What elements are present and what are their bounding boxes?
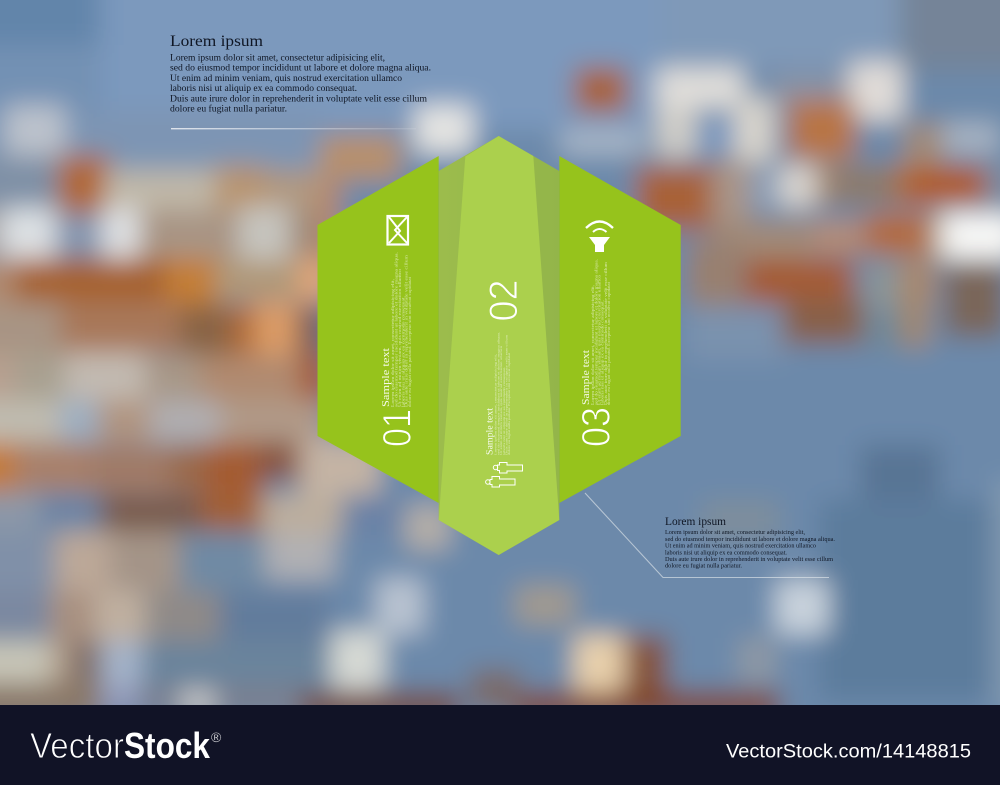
callout: top text block: dolore eu fugiat nulla pariatur. [170, 104, 287, 114]
body text 03: Duis aute irure dolor in reprehenderit in voluptate velit esse cillum [604, 262, 608, 405]
body text 02: Lorem ipsum dolor sit amet, consectetur adipisicing elit, [494, 354, 498, 455]
panel 03 content [574, 222, 618, 447]
icon: wifi speaker [586, 222, 613, 252]
panel 02 content [482, 280, 526, 487]
callout: top text block: sed do eiusmod tempor incididunt ut labore et dolore magna aliqua. [170, 64, 431, 74]
callout: lower text block: Lorem ipsum [665, 516, 726, 528]
callout: lower text block [665, 516, 835, 570]
center segment front [439, 136, 559, 555]
callout: top text block: laboris nisi ut aliquip ex ea commodo consequat. [170, 84, 357, 94]
body text 03: dolore eu fugiat nulla pariatur. Excepteur sint occaecat cupidatat [607, 281, 611, 405]
body text 03: laboris nisi ut aliquip ex ea commodo consequat. [601, 300, 605, 405]
sample heading 03: Sample text [581, 350, 592, 405]
callout: top text block: Lorem ipsum dolor sit amet, consectetur adipisicing elit, [170, 54, 385, 64]
body text 01: sed do eiusmod tempor incididunt ut labore et dolore magna aliqua. [394, 252, 398, 407]
right segment [559, 156, 681, 503]
callout: lower text block: laboris nisi ut aliquip ex ea commodo consequat. [665, 549, 787, 556]
callout: top text block [170, 33, 431, 114]
body text 02: dolore eu fugiat nulla pariatur. Excepteur sint occaecat cupidatat [507, 353, 511, 455]
panel 01 content [376, 216, 420, 447]
body text 02: Ut enim ad minim veniam, quis nostrud exercitation ullamco [499, 346, 504, 455]
sample heading 01: Sample text [380, 348, 392, 407]
callout: top text block: Ut enim ad minim veniam, quis nostrud exercitation ullamco [170, 74, 402, 84]
top callout line [171, 128, 416, 129]
callout: lower text block: Duis aute irure dolor in reprehenderit in voluptate velit esse cillum [665, 556, 833, 563]
body text 02: Duis aute irure dolor in reprehenderit in voluptate velit esse cillum [504, 335, 508, 455]
center segment back fold [439, 136, 559, 555]
hexagon diagram [318, 136, 681, 555]
footer image id: VectorStock.com/14148815 [726, 742, 971, 763]
footer logo: Stock [124, 725, 211, 766]
body text 01: Ut enim ad minim veniam, quis nostrud exercitation ullamco [397, 269, 403, 407]
callout: top text block: Lorem ipsum [170, 33, 264, 50]
body text 01 [390, 252, 412, 407]
body text 02 [494, 332, 511, 455]
callout: lower text block: Ut enim ad minim veniam, quis nostrud exercitation ullamco [665, 543, 816, 550]
icon: bottles [486, 462, 522, 487]
footer bar [0, 705, 1000, 785]
callout: lower text block: dolore eu fugiat nulla pariatur. [665, 563, 742, 570]
callout leader line [585, 493, 829, 578]
footer logo [30, 725, 222, 766]
body text 01: Lorem ipsum dolor sit amet, consectetur adipisicing elit, [390, 279, 396, 407]
body text 01: laboris nisi ut aliquip ex ea commodo consequat. [400, 296, 405, 407]
body text 01: Duis aute irure dolor in reprehenderit in voluptate velit esse cillum [404, 254, 409, 407]
callout: top text block: Duis aute irure dolor in reprehenderit in voluptate velit esse cillum [170, 94, 428, 104]
body text 02: laboris nisi ut aliquip ex ea commodo consequat. [502, 367, 506, 455]
number 01: 01 [376, 409, 420, 447]
body text 03: Ut enim ad minim veniam, quis nostrud exercitation ullamco [598, 275, 602, 405]
body text 02: sed do eiusmod tempor incididunt ut labore et dolore magna aliqua. [496, 332, 500, 455]
footer logo: Vector [30, 725, 124, 766]
body text 01: dolore eu fugiat nulla pariatur. Excepteur sint occaecat cupidatat [407, 276, 412, 407]
callout: lower text block: Lorem ipsum dolor sit amet, consectetur adipisicing elit, [665, 529, 805, 536]
body text 03: sed do eiusmod tempor incididunt ut labore et dolore magna aliqua. [594, 259, 598, 405]
number 02: 02 [482, 280, 526, 322]
footer logo: ® [211, 729, 222, 745]
sample heading 02: Sample text [484, 407, 494, 455]
body text 03: Lorem ipsum dolor sit amet, consectetur adipisicing elit, [591, 285, 596, 405]
number 03: 03 [574, 407, 618, 447]
icon: envelope [388, 216, 408, 244]
callout: lower text block: sed do eiusmod tempor incididunt ut labore et dolore magna aliqua. [665, 536, 835, 543]
left segment [318, 156, 439, 503]
body text 03 [591, 259, 611, 405]
